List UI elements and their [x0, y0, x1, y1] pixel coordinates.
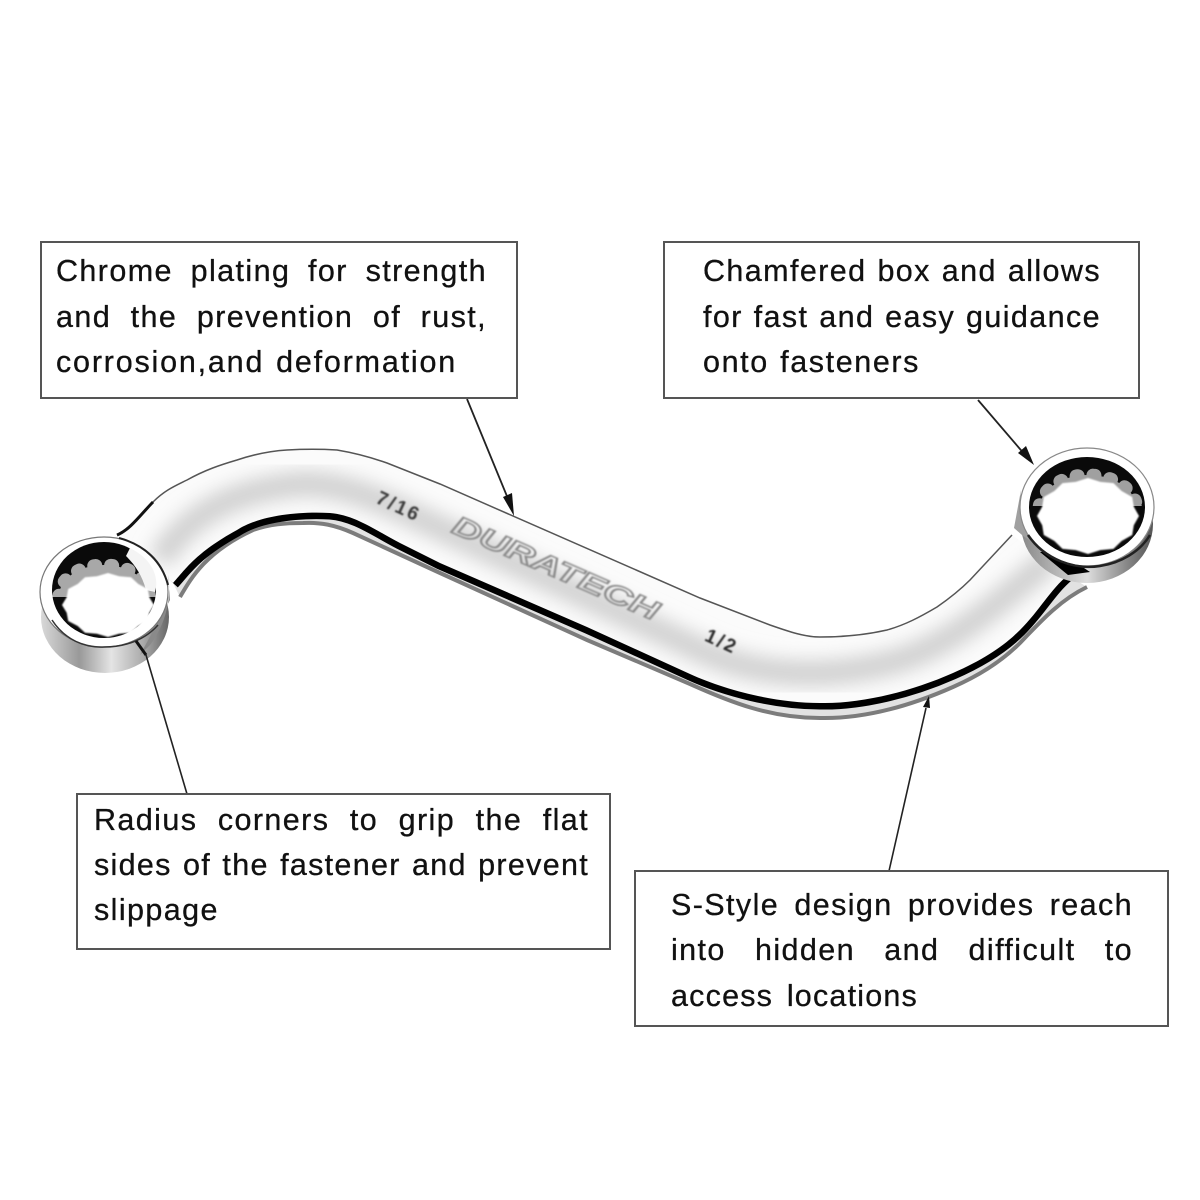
callout: chamfered box: Chamfered box and allows [703, 254, 1101, 288]
small box end, left [40, 537, 170, 673]
grey lower outline of the underside [180, 523, 1087, 718]
callout: s-style design: S-Style design provides reach [671, 888, 1133, 922]
black lower edge of the handle [173, 513, 1068, 703]
arrow: radius corners callout to small box end [136, 641, 187, 794]
engraved size 7/16: 7/16 [373, 488, 424, 527]
callout: s-style design [634, 870, 1169, 1027]
large box end, right [1014, 448, 1154, 583]
callout: radius corners: Radius corners to grip the flat [94, 803, 589, 837]
callout: chamfered box: onto fasteners [703, 345, 920, 379]
callout: chamfered box [663, 241, 1140, 399]
engraved brand name: DURATECH [448, 510, 664, 627]
callout: chamfered box: for fast and easy guidance [703, 300, 1101, 334]
callout: radius corners: slippage [94, 893, 219, 927]
callout: s-style design: access locations [671, 979, 918, 1013]
arrow: chrome plating callout to handle [467, 399, 514, 516]
callout: chrome plating: corrosion,and deformation [56, 345, 457, 379]
callout: chrome plating: Chrome plating for strength [56, 254, 487, 288]
callout: radius corners: sides of the fastener and prevent [94, 848, 589, 882]
wrench underside band [173, 513, 1087, 718]
callout: chrome plating: and the prevention of rust, [56, 300, 487, 334]
callout: chrome plating [40, 241, 518, 399]
illustration: s-style wrench with pointer arrows [39, 399, 1155, 870]
engraved size 1/2: 1/2 [702, 626, 741, 659]
callout: radius corners [76, 793, 611, 950]
wrench [40, 448, 1154, 718]
arrow: s-style callout to handle [889, 696, 930, 871]
callout: s-style design: into hidden and difficult to [671, 933, 1133, 967]
arrow: chamfered box callout to large box end [978, 400, 1034, 465]
polished handle face [117, 449, 1068, 703]
